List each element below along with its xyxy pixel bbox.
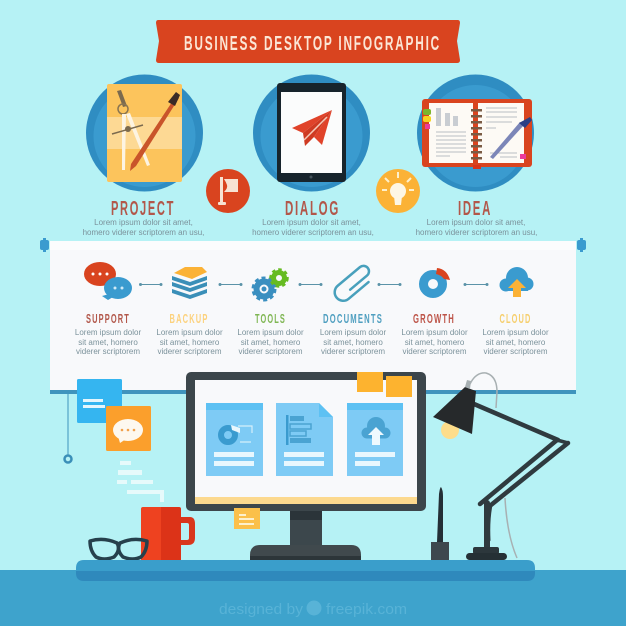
item: backup [156,267,223,356]
sticky notes on monitor [357,372,412,397]
glasses [90,539,147,559]
cloud description: viderer scriptorem [483,347,548,356]
tools label: TOOLS [255,311,286,326]
lamp base [466,547,507,560]
backup description: Lorem ipsum dolor [156,328,223,337]
backup description [156,328,223,356]
tools description: sit amet, homero [241,338,301,347]
cloud description [482,328,549,356]
icon: cloud upload [500,267,534,297]
idea label: IDEA [458,198,492,220]
project description: Lorem ipsum dolor sit amet, [94,218,193,227]
icon: blueprint with compass and pencil [107,84,182,182]
title banner: BUSINESS DESKTOP INFOGRAPHIC [184,33,441,55]
icon: gears [253,270,288,300]
growth description: viderer scriptorem [402,347,467,356]
dialog description [252,218,374,237]
dialog label: DIALOG [285,198,340,220]
support description: Lorem ipsum dolor [75,328,141,337]
icon: stacked layers [172,267,207,299]
tools description: viderer scriptorem [238,347,303,356]
floor [0,570,626,626]
growth description: sit amet, homero [405,338,465,347]
icon: lightbulb badge [376,169,420,213]
cloud label: CLOUD [500,311,532,326]
footer credit: freepik.com [326,601,407,618]
icon: right pin [577,238,586,252]
pull cord [64,392,72,462]
desk [76,560,535,581]
icon: paperclip [331,264,375,304]
documents description: viderer scriptorem [321,347,385,356]
icon: chat bubbles [84,262,132,300]
document: cloud upload [347,403,403,476]
document: donut chart [206,403,263,476]
icon: tablet with paper plane [277,83,346,182]
idea description [416,218,537,237]
pen holder [431,487,449,560]
item: cloud [482,267,549,356]
panel: hanging board [40,238,586,394]
project description: homero viderer scriptorem an usu, [83,228,204,237]
support description: sit amet, homero [78,338,138,347]
panel: idea [416,74,537,237]
backup description: sit amet, homero [160,338,220,347]
lamp glow [441,421,459,439]
document: bar list [276,403,333,476]
dialog description: Lorem ipsum dolor sit amet, [262,218,361,227]
icon: donut chart [424,268,450,294]
footer credit: designed by [219,601,304,618]
dialog description: homero viderer scriptorem an usu, [252,228,374,237]
idea description: Lorem ipsum dolor sit amet, [427,218,525,227]
lamp cable [470,373,517,558]
lamp arms [474,404,568,548]
growth description: Lorem ipsum dolor [401,328,468,337]
backup description: viderer scriptorem [157,347,222,356]
cloud description: Lorem ipsum dolor [482,328,549,337]
support label: SUPPORT [86,311,130,326]
desk lamp [433,373,568,560]
footer credit [219,600,407,618]
icon: open notebook with pen [422,99,532,169]
title banner [156,20,460,63]
sticky note under monitor [234,508,260,529]
monitor stand [250,511,361,560]
documents description: sit amet, homero [323,338,383,347]
sticky note: orange with speech bubble [106,406,151,451]
support description: viderer scriptorem [76,347,140,356]
documents label: DOCUMENTS [323,311,383,326]
sticky note: blue [77,379,122,423]
support description [75,328,141,356]
panel: dialog [252,74,374,237]
item: documents [320,264,386,356]
tools description [237,328,304,356]
lamp shade [433,387,476,434]
documents description: Lorem ipsum dolor [320,328,386,337]
item: growth [401,268,468,356]
panel: project [83,74,204,237]
documents description [320,328,386,356]
monitor [186,372,426,560]
tools description: Lorem ipsum dolor [237,328,304,337]
idea description: homero viderer scriptorem an usu, [416,228,537,237]
item: tools [237,270,304,356]
growth description [401,328,468,356]
project description [83,218,204,237]
mug [141,507,195,560]
coffee steam [117,461,164,502]
item: support [75,262,141,356]
project label: PROJECT [111,198,175,220]
arrows between items [140,284,488,286]
cloud description: sit amet, homero [486,338,546,347]
icon: red flag badge [206,169,250,213]
icon: left pin [40,238,49,252]
backup label: BACKUP [170,311,208,326]
growth label: GROWTH [413,311,455,326]
